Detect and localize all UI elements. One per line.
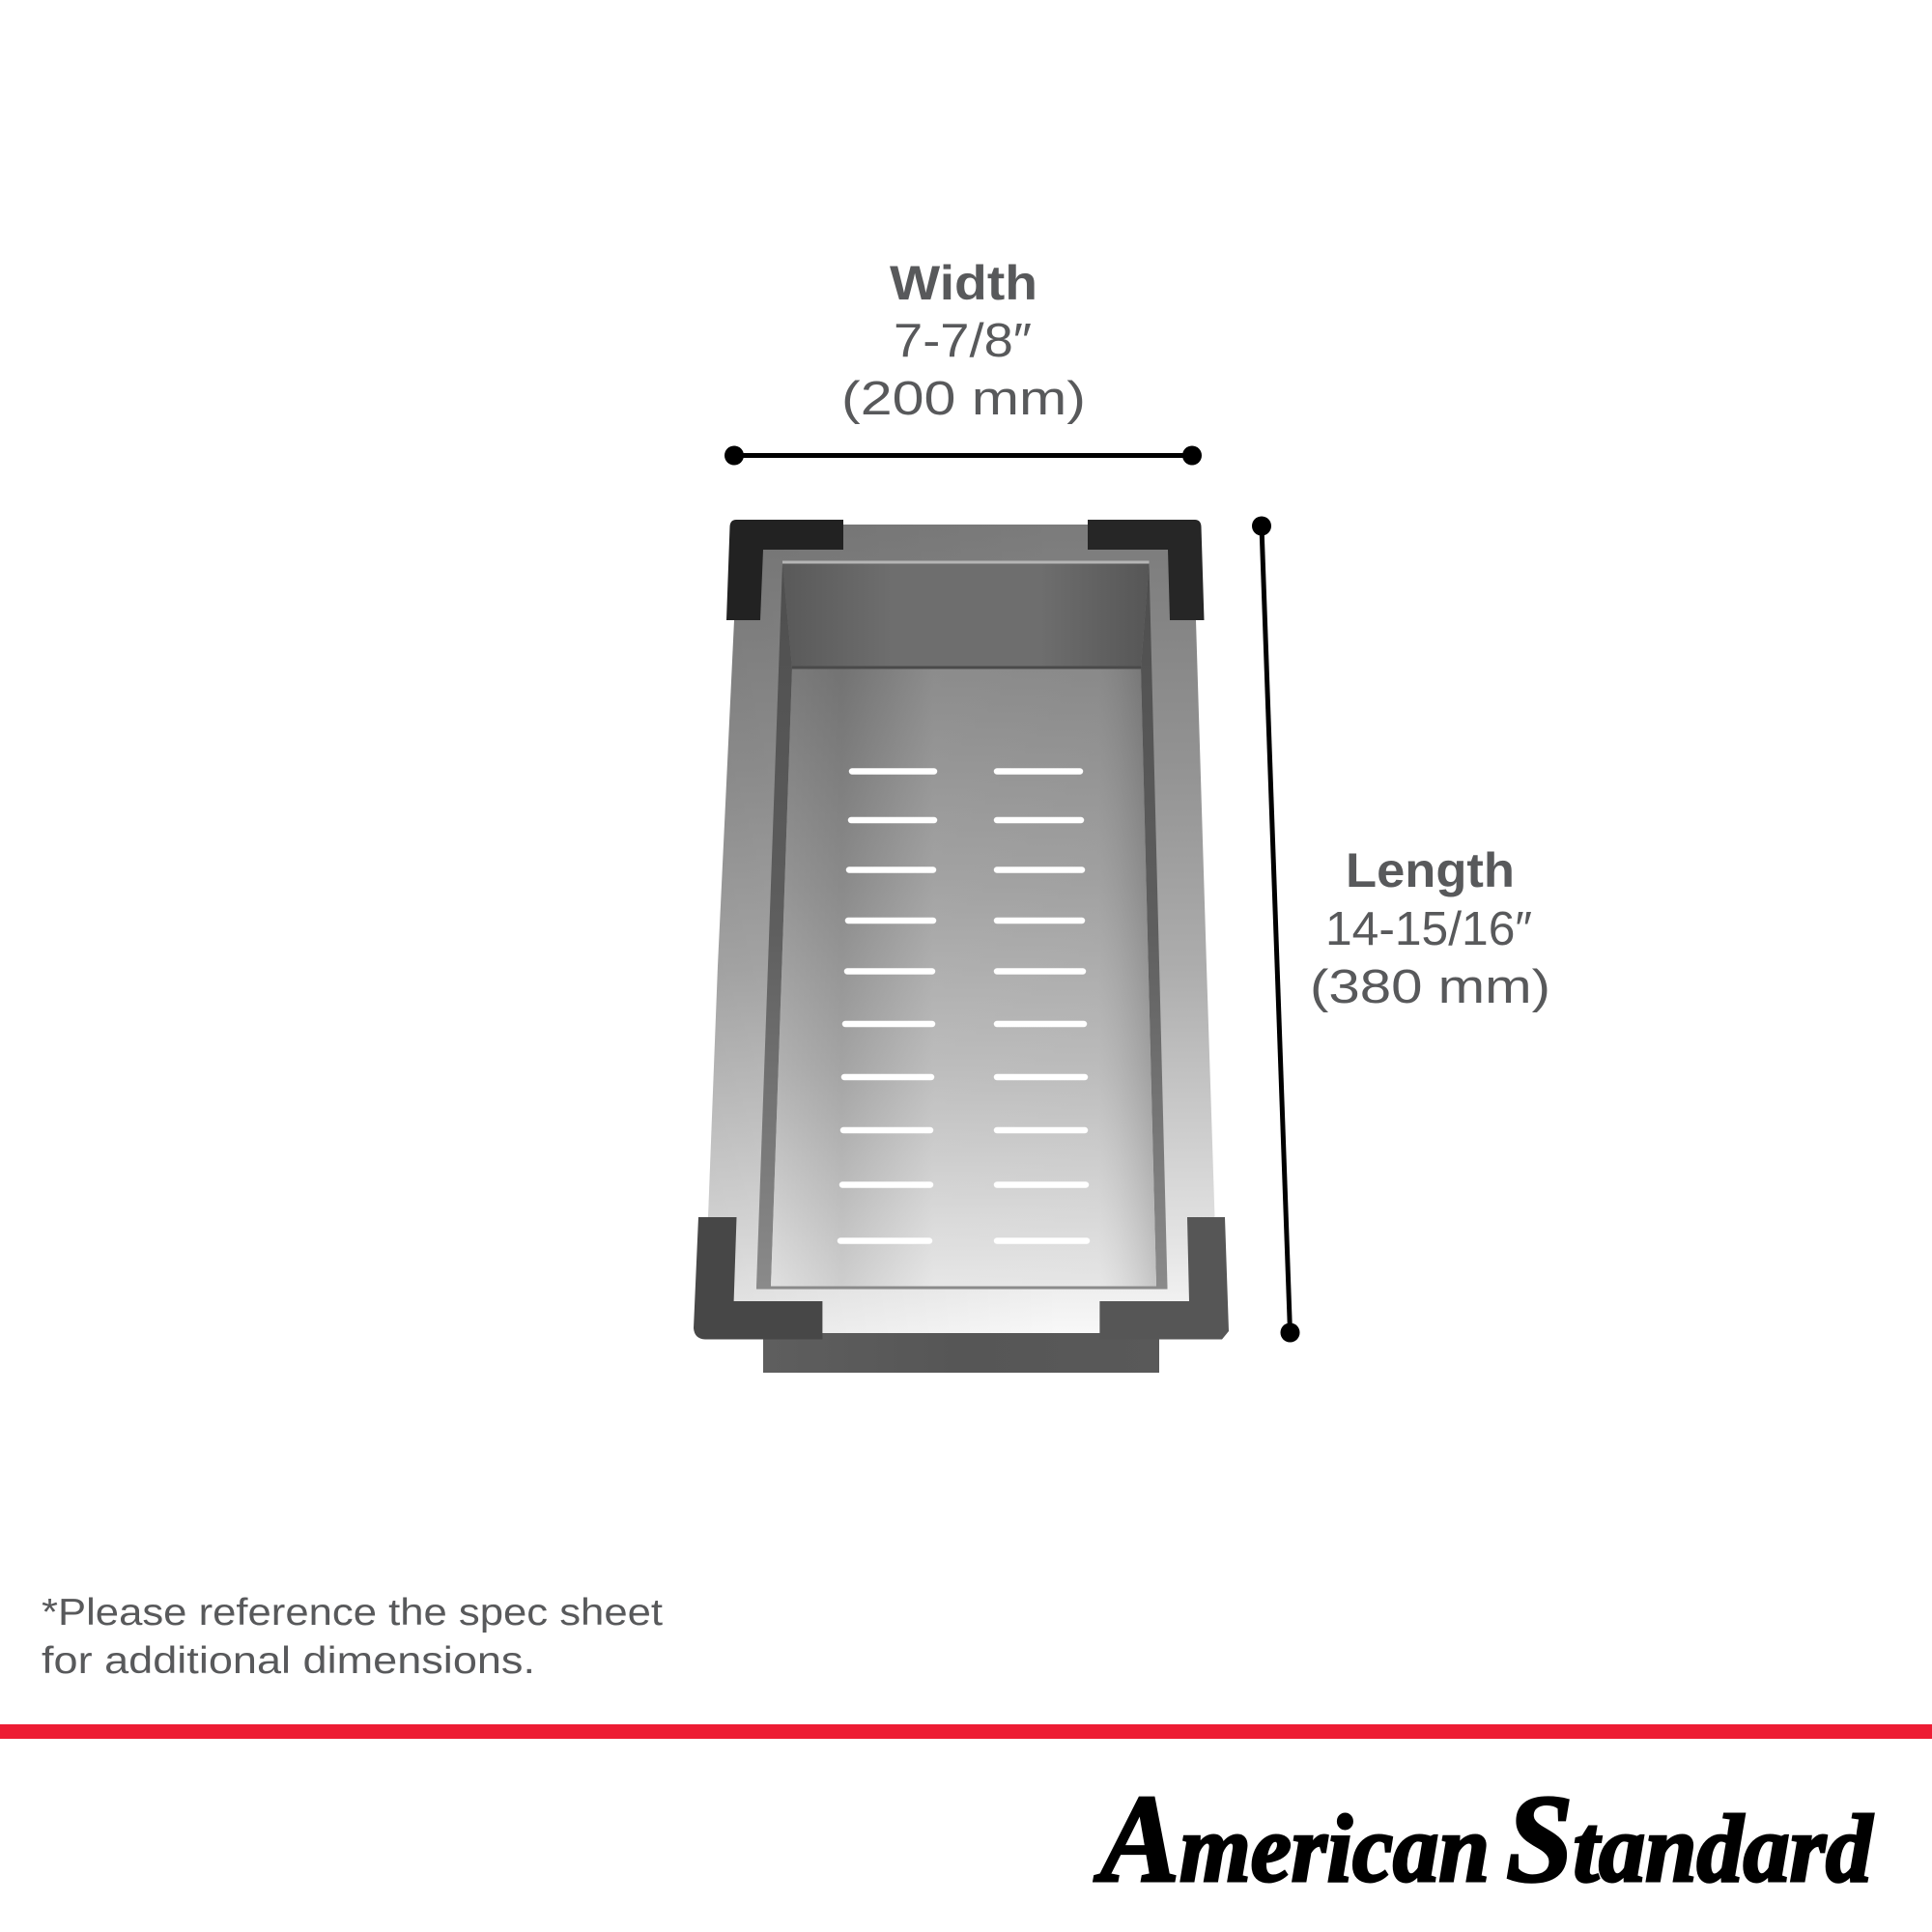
arrow: length dimension line bbox=[1252, 516, 1300, 1343]
drain slots bbox=[840, 771, 1087, 1240]
corner clip: top right bbox=[1088, 520, 1204, 620]
opening edges bbox=[756, 562, 1167, 1288]
footnote: *Please reference the spec sheet bbox=[42, 1592, 663, 1634]
lower basin box bbox=[763, 1328, 1159, 1373]
arrow: width dimension line bbox=[724, 446, 1202, 466]
logo: American Standard: American bbox=[1094, 1770, 1490, 1909]
right wall bbox=[1141, 563, 1167, 1287]
heading: width dimension: Width bbox=[890, 256, 1037, 310]
heading: width dimension: (200 mm) bbox=[841, 373, 1086, 425]
heading: width dimension: 7-7/8″ bbox=[894, 315, 1032, 367]
floor bbox=[771, 668, 1156, 1287]
corner clip: bottom left bbox=[694, 1217, 822, 1339]
heading: width dimension bbox=[841, 256, 1086, 425]
rear wall bbox=[782, 563, 1150, 668]
heading: length dimension: Length bbox=[1346, 843, 1515, 897]
footnote bbox=[42, 1592, 663, 1682]
corner clip: bottom right bbox=[1099, 1217, 1229, 1339]
heading: length dimension: (380 mm) bbox=[1310, 961, 1550, 1013]
logo: American Standard: Standard bbox=[1506, 1770, 1874, 1909]
product: sink colander bbox=[694, 520, 1229, 1373]
corner clip: top left bbox=[726, 520, 843, 620]
heading: length dimension bbox=[1310, 843, 1550, 1013]
rim surface bbox=[706, 525, 1219, 1333]
logo: American Standard bbox=[1094, 1770, 1874, 1909]
heading: length dimension: 14-15/16″ bbox=[1325, 903, 1532, 955]
footnote: for additional dimensions. bbox=[42, 1640, 535, 1682]
left wall bbox=[756, 563, 792, 1287]
red divider bar bbox=[0, 1724, 1932, 1739]
